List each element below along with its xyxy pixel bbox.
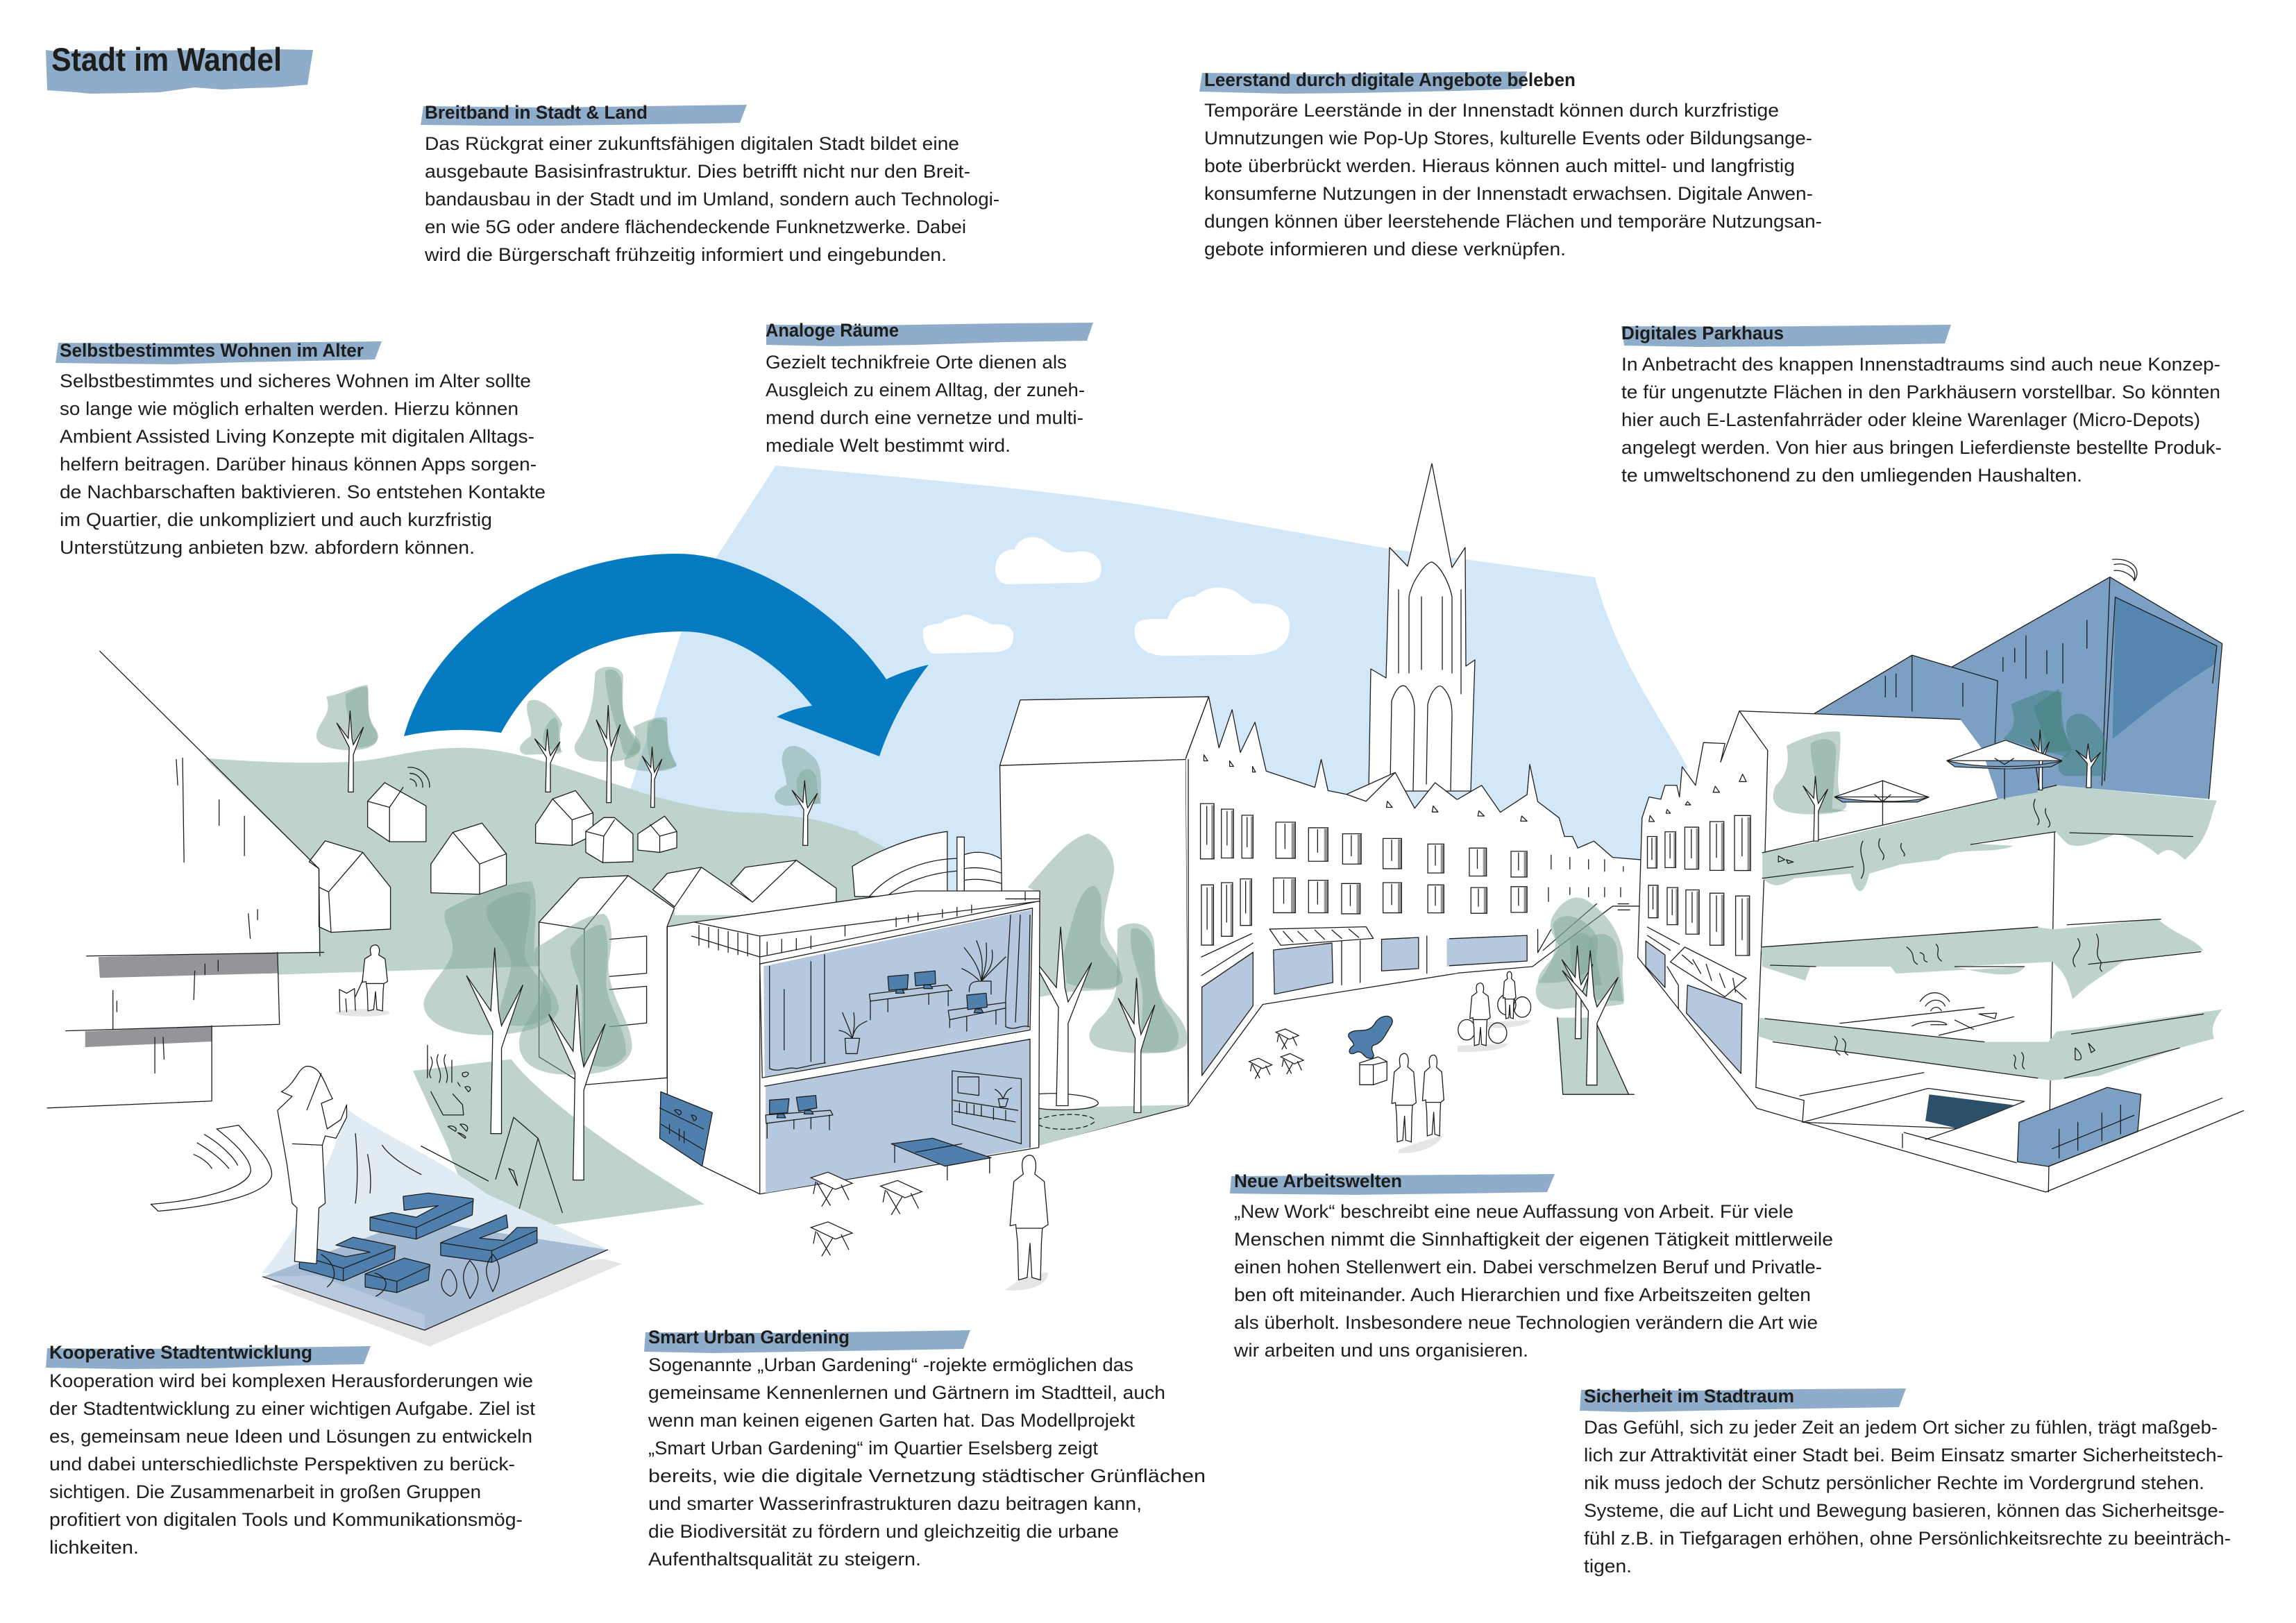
text block: Kooperative Stadtentwicklung [46,1342,536,1558]
title: Stadt im Wandel [46,41,313,94]
blue micro depot box [2018,1087,2222,1166]
heading: Smart Urban Gardening [648,1327,850,1348]
text block: Breitband in Stadt und Land: Das Rückgrat einer zukunftsfähigen digitalen Stadt bildet eine [425,133,959,154]
left building outline [47,651,323,1108]
blue vending box at the building [660,1091,712,1166]
text block: Kooperative Stadtentwicklung: der Stadtentwicklung zu einer wichtigen Aufgabe. Ziel ist [49,1398,536,1419]
text block: Breitband in Stadt und Land [421,102,999,265]
text block: Digitales Parkhaus: hier auch E-Lastenfahrräder oder kleine Warenlager (Micro-Depots) [1621,409,2200,430]
text block: Neue Arbeitswelten: einen hohen Stellenwert ein. Dabei verschmelzen Beruf und Privatle- [1234,1257,1822,1277]
street tree and planting [1536,898,1634,1094]
text block: Selbstbestimmtes Wohnen im Alter: im Quartier, die unkompliziert und auch kurzfristig [60,509,492,530]
text block: Kooperative Stadtentwicklung: lichkeiten. [49,1537,139,1558]
panel: co-working building and central square [652,697,1473,1291]
heading: Breitband in Stadt & Land [425,102,648,123]
rooftop trees [1773,688,2107,841]
heading [421,102,747,126]
two people on the square [1392,1053,1444,1153]
text block: Leerstand: Temporäre Leerstände in der Innenstadt können durch kurzfristige [1204,100,1779,121]
building beside the meadow [539,876,675,1085]
heading [1230,1171,1555,1195]
rooftop umbrellas [1834,740,2062,825]
text block: Sicherheit im Stadtraum: tigen. [1584,1556,1632,1577]
green courtyard and trees [1028,834,1188,1146]
facade windows [1201,804,1444,945]
text block: Breitband in Stadt und Land: ausgebaute Basisinfrastruktur. Dies betrifft nicht nur den Breit- [425,161,970,182]
text block: Smart Urban Gardening: Sogenannte „Urban Gardening“ -rojekte ermöglichen das [648,1354,1133,1375]
tall white building with gable [1000,697,1208,1145]
heading: Digitales Parkhaus [1621,323,1784,343]
table tennis table [891,1138,991,1166]
text block: Breitband in Stadt und Land: bandausbau in der Stadt und im Umland, sondern auch Technologi- [425,189,999,210]
woman walking with dog [335,945,390,1017]
text block: Smart Urban Gardening: bereits, wie die digitale Vernetzung städtischer Grünflächen [648,1465,1206,1486]
text block: Smart Urban Gardening: und smarter Wasserinfrastrukturen dazu beitragen kann, [648,1493,1142,1514]
heading: Analoge Räume [766,320,899,341]
text block: Breitband in Stadt und Land: en wie 5G oder andere flächendeckende Funknetzwerke. Dabei [425,216,966,237]
text block: Digitales Parkhaus: angelegt werden. Von hier aus bringen Lieferdienste bestellte Produk- [1621,437,2222,458]
large green trees [423,882,632,1075]
text block: Sicherheit im Stadtraum [1580,1386,2231,1577]
street curb lines [151,1125,272,1212]
heading [766,320,1093,346]
rounded arena building [852,831,1002,897]
text block: Leerstand [1199,69,1822,260]
parking garage right wing body [1638,711,2243,1192]
text block: Kooperative Stadtentwicklung: Kooperation wird bei komplexen Herausforderungen wie [49,1370,533,1391]
text block: Sicherheit im Stadtraum: Systeme, die auf Licht und Bewegung basieren, können das Sicherheitsge- [1584,1500,2225,1521]
text block: Sicherheit im Stadtraum: Das Gefühl, sich zu jeder Zeit an jedem Ort sicher zu fühlen, trägt maßgeb- [1584,1417,2218,1438]
panel: digital parking garage and right district [1447,559,2243,1192]
heading [46,1342,371,1369]
text block: Selbstbestimmtes Wohnen im Alter: Ambient Assisted Living Konzepte mit digitalen Alltags- [60,426,534,447]
text block: Smart Urban Gardening: Aufenthaltsqualität zu steigern. [648,1549,921,1570]
garden bed sketches [428,1045,562,1217]
text block: Selbstbestimmtes Wohnen im Alter: Selbstbestimmtes und sicheres Wohnen im Alter sollte [60,371,531,391]
text block: Smart Urban Gardening: wenn man keinen eigenen Garten hat. Das Modellprojekt [648,1410,1135,1431]
text block: Digitales Parkhaus: In Anbetracht des knappen Innenstadtraums sind auch neue Konzep- [1621,354,2220,375]
text block: Selbstbestimmtes Wohnen im Alter: helfern beitragen. Darüber hinaus können Apps sorgen- [60,454,537,475]
heading [1580,1386,1906,1412]
countryside trees [316,667,677,807]
text block: Selbstbestimmtes Wohnen im Alter: de Nachbarschaften baktivieren. So entstehen Kontakte [60,482,546,502]
text block: Digitales Parkhaus [1621,323,2222,486]
text block: Kooperative Stadtentwicklung: und dabei unterschiedlichste Perspektiven zu berück- [49,1454,515,1475]
text block: Breitband in Stadt und Land: wird die Bürgerschaft frühzeitig informiert und eingebunden. [424,244,947,265]
text block: Sicherheit im Stadtraum: lich zur Attraktivität einer Stadt bei. Beim Einsatz smarter Sicherheitstech- [1584,1445,2223,1465]
clouds [923,537,1290,656]
title: Stadt im Wandel: Stadt im Wandel [51,41,282,78]
garage entrance and ground lines [1756,993,2025,1163]
text block: Smart Urban Gardening [644,1327,1206,1570]
text block: Sicherheit im Stadtraum: nik muss jedoch der Schutz persönlicher Rechte im Vordergrund stehen. [1584,1472,2204,1493]
text block: Smart Urban Gardening: die Biodiversität zu fördern und gleichzeitig die urbane [648,1521,1119,1542]
heading: Kooperative Stadtentwicklung [49,1342,312,1363]
text block: Kooperative Stadtentwicklung: sichtigen. Die Zusammenarbeit in großen Gruppen [49,1481,481,1502]
countryside houses [309,783,677,933]
text block: Leerstand: dungen können über leerstehende Flächen und temporäre Nutzungsan- [1204,211,1822,232]
cyclists [1458,971,1531,1052]
tables in front of workspace [811,1029,1303,1256]
text block: Digitales Parkhaus: te für ungenutzte Flächen in den Parkhäusern vorstellbar. So könnten [1621,382,2220,402]
tree on hill [775,746,821,845]
text block: Neue Arbeitswelten: ben oft miteinander. Auch Hierarchien und fixe Arbeitszeiten gelten [1234,1284,1811,1305]
text block: Neue Arbeitswelten: als überholt. Insbesondere neue Technologien verändern die Art wie [1234,1312,1818,1333]
text block: Smart Urban Gardening: „Smart Urban Gardening“ im Quartier Eselsberg zeigt [648,1438,1098,1459]
text block: Neue Arbeitswelten: „New Work“ beschreibt eine neue Auffassung von Arbeit. Für viele [1234,1201,1793,1222]
text block: Smart Urban Gardening: gemeinsame Kennenlernen und Gärtnern im Stadtteil, auch [648,1382,1165,1403]
text block: Neue Arbeitswelten: Menschen nimmt die Sinnhaftigkeit der eigenen Tätigkeit mittlerweile [1234,1229,1833,1250]
man standing in the foreground [1006,1155,1048,1291]
heading: Leerstand durch digitale Angebote beleben [1204,69,1576,90]
wifi signals [408,767,727,867]
sculpture on a plinth [1349,1016,1392,1085]
text block: Kooperative Stadtentwicklung: es, gemeinsam neue Ideen und Lösungen zu entwickeln [49,1426,532,1447]
rooftops behind the workspace [652,860,836,915]
text block: Selbstbestimmtes Wohnen im Alter [56,340,546,558]
curtains, desks, plants and screens [766,915,1030,1144]
text block: Leerstand: gebote informieren und diese verknüpfen. [1204,239,1566,260]
heading [1621,323,1951,347]
text block: Analoge Räume [766,320,1093,456]
text block: Leerstand: Umnutzungen wie Pop-Up Stores, kulturelle Events oder Bildungsange- [1204,128,1812,148]
shared green ground [413,1059,704,1227]
text block: Neue Arbeitswelten [1230,1171,1833,1361]
city street wing [1186,697,1473,1105]
text block: Analoge Räume: Ausgleich zu einem Alltag, der zuneh- [766,380,1085,400]
panel: illustration of the changing city [47,464,2243,1346]
text block: Leerstand: konsumferne Nutzungen in der Innenstadt erwachsen. Digitale Anwen- [1204,183,1813,204]
text block: Digitales Parkhaus: te umweltschonend zu den umliegenden Haushalten. [1621,465,2082,486]
hill behind the workspace [694,809,947,915]
text block: Analoge Räume: mend durch eine vernetze und multi- [766,407,1083,428]
digital city model on tablet projection [262,1108,623,1346]
text block: Neue Arbeitswelten: wir arbeiten und uns organisieren. [1233,1340,1528,1361]
heading: Selbstbestimmtes Wohnen im Alter [60,340,364,361]
white row houses of the street [1447,765,1640,974]
text block: Selbstbestimmtes Wohnen im Alter: Unterstützung anbieten bzw. abfordern können. [60,537,475,558]
church tower [1369,464,1475,791]
large blue arrow from country to city [404,554,929,756]
workspace building cross-section [667,891,1040,1194]
text block: Leerstand: bote überbrückt werden. Hieraus können auch mittel- und langfristig [1204,155,1795,176]
heading [644,1327,970,1353]
text block: Analoge Räume: mediale Welt bestimmt wird. [766,435,1011,456]
green hills [205,748,891,975]
green planted parking decks [1758,785,2222,1080]
text block: Analoge Räume: Gezielt technikfreie Orte dienen als [766,352,1067,373]
text block: Sicherheit im Stadtraum: fühl z.B. in Tiefgaragen erhöhen, ohne Persönlichkeitsrechte zu beeinträch- [1584,1528,2231,1549]
heading: Sicherheit im Stadtraum [1584,1386,1794,1407]
text block: Selbstbestimmtes Wohnen im Alter: so lange wie möglich erhalten werden. Hierzu können [60,398,518,419]
text block: Kooperative Stadtentwicklung: profitiert von digitalen Tools und Kommunikationsmög- [49,1509,523,1530]
heading: Neue Arbeitswelten [1234,1171,1402,1191]
right wing windows [1647,815,1750,955]
blue parking tower [1815,559,2222,799]
woman holding a smartphone [278,1067,346,1264]
large tree trunks [466,948,605,1180]
sky background [630,466,1687,902]
panel: countryside and left district [47,651,891,1346]
